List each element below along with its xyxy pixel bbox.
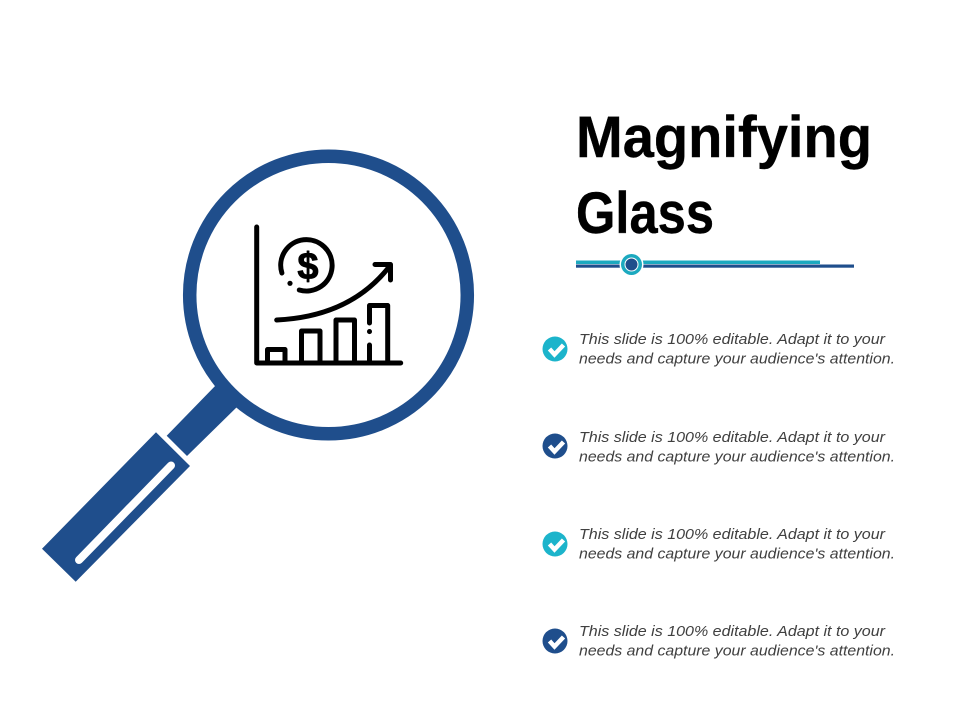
icon: navy check (542, 628, 568, 654)
handle grip (42, 432, 190, 582)
bullet 4 text: This slide is 100% editable. Adapt it to your (579, 623, 886, 640)
bullet 4 text: needs and capture your audience's attention. (579, 642, 895, 660)
bullet 1 text: needs and capture your audience's attention. (579, 350, 895, 368)
bullet 1 (542, 331, 895, 368)
dollar coin arc (281, 240, 332, 291)
bullet 4 (542, 623, 895, 660)
bar 3 (336, 320, 354, 363)
dollar sign: $ (297, 246, 319, 288)
bar 2 (302, 331, 320, 363)
icon: teal check (542, 532, 568, 556)
bullet 3 (542, 526, 895, 562)
bullet 2 (542, 429, 895, 466)
icon: navy check (542, 434, 568, 458)
magnifying glass (42, 156, 467, 582)
handle neck (167, 383, 240, 456)
bullet 3 text: needs and capture your audience's attention. (579, 546, 895, 562)
bar 4 with dashed edge (370, 306, 388, 363)
chart axes (257, 227, 401, 363)
icon: teal check (542, 336, 568, 362)
title: Magnifying (576, 105, 872, 170)
icon: growth chart with dollar coin (257, 227, 401, 363)
lens ring (190, 156, 467, 434)
bar 1 (268, 350, 285, 363)
title: Glass (576, 181, 714, 246)
bullet 1 text: This slide is 100% editable. Adapt it to your (579, 331, 886, 348)
coin dot (287, 281, 293, 286)
bullet 3 text: This slide is 100% editable. Adapt it to your (579, 526, 886, 543)
growth arrow (277, 264, 390, 320)
bullet 2 text: needs and capture your audience's attention. (579, 448, 895, 466)
title (576, 105, 872, 246)
bullet 2 text: This slide is 100% editable. Adapt it to your (579, 429, 886, 446)
handle slot (79, 466, 171, 560)
title divider (576, 252, 854, 276)
